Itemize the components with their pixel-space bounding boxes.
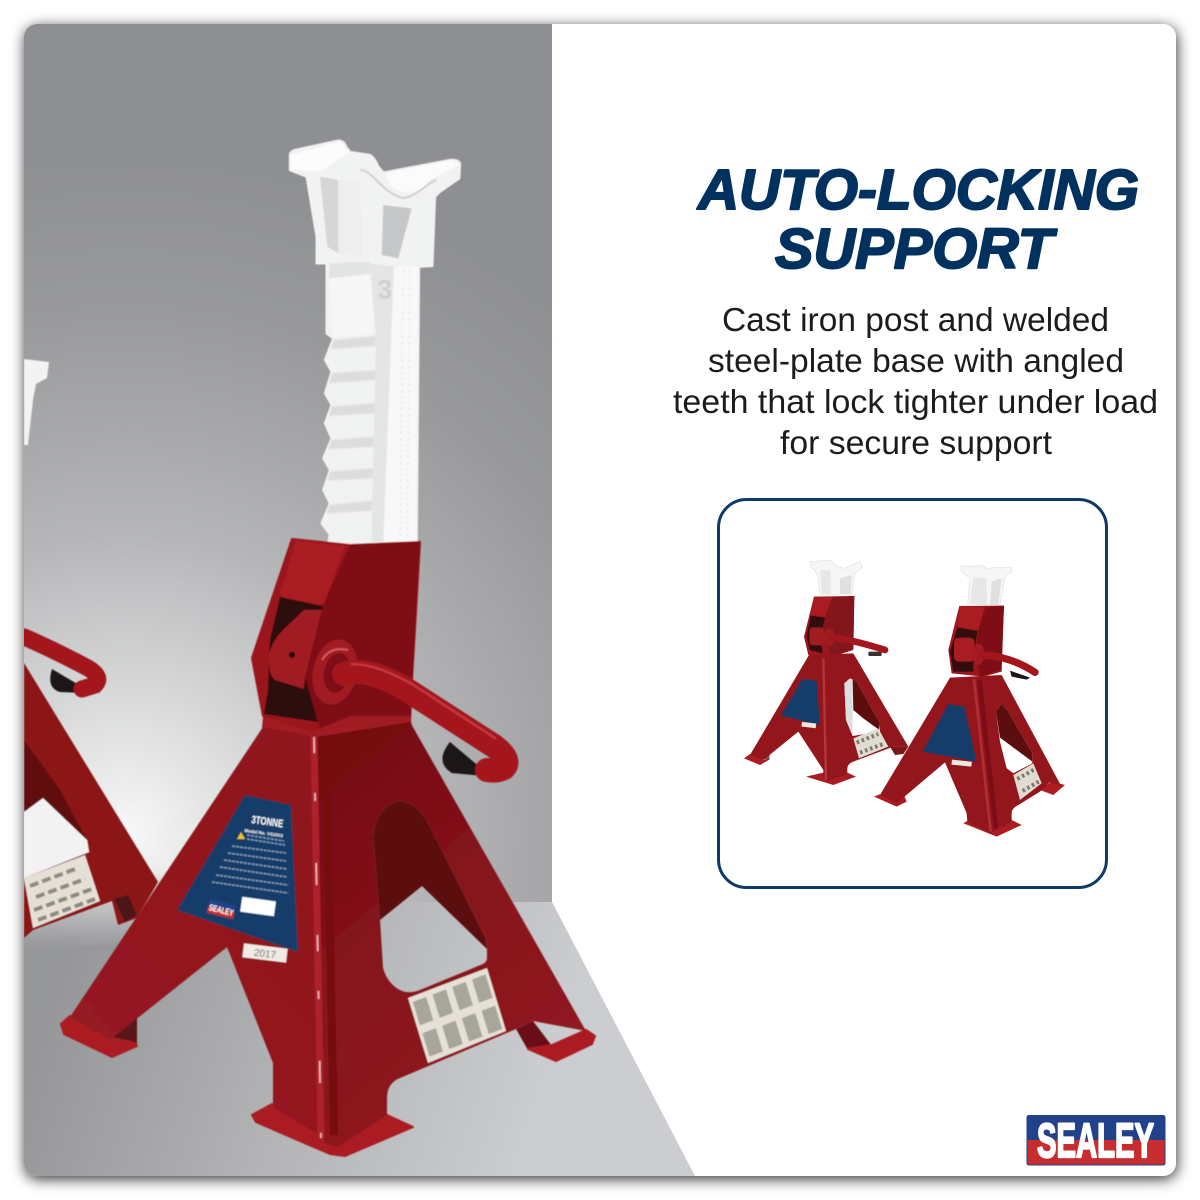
left jack foot shadow [114, 895, 137, 922]
head slot [264, 597, 323, 722]
panel: studio photo [24, 24, 695, 1176]
rear jack window interior [853, 679, 880, 730]
right-of-spine band [326, 745, 334, 1135]
post side band [383, 314, 393, 542]
blue instruction label: Model No. VS2003 [244, 828, 284, 838]
base right face with window [316, 722, 586, 1147]
post saddle top [291, 141, 349, 172]
blue instruction label: SEALEY [208, 902, 235, 918]
main jack [61, 141, 595, 1156]
head side plate [305, 542, 420, 728]
front jack feet [874, 782, 1065, 837]
heading [696, 158, 1139, 281]
front jack rubber [1010, 671, 1030, 680]
base weld band [262, 716, 412, 740]
rear jack window slot [844, 678, 853, 736]
front jack spine [974, 679, 991, 832]
post recess right [382, 205, 412, 258]
post front block [329, 274, 374, 337]
handle [344, 664, 506, 771]
rear jack head [804, 596, 854, 657]
wall backdrop [24, 24, 552, 1176]
description text: teeth that lock tighter under load [673, 383, 1158, 420]
year tag: 2017 [253, 948, 277, 961]
front jack tag [951, 760, 972, 767]
thumbnail frame [718, 500, 1106, 888]
centre spine highlight [314, 737, 321, 1138]
base left face [70, 727, 338, 1147]
spine sparkle [314, 737, 321, 1138]
description text [673, 301, 1158, 461]
front jack handle [983, 655, 1035, 672]
post side shading [370, 263, 394, 542]
rear jack post [811, 560, 863, 595]
cylinder hole [289, 652, 295, 658]
window rear interior [374, 801, 487, 949]
rear jack label [781, 679, 820, 725]
left partial jack [24, 359, 158, 938]
left jack safety sticker [24, 855, 100, 928]
rear jack handle [832, 637, 885, 650]
rear feet [113, 1018, 551, 1049]
rear jack feet [744, 747, 908, 785]
description text: steel-plate base with angled [708, 342, 1124, 379]
head top plate [280, 540, 345, 605]
rear jack rubber [868, 652, 882, 656]
year tag [242, 943, 288, 963]
front jack window interior [996, 703, 1032, 762]
head housing [252, 539, 420, 735]
collar [307, 635, 363, 709]
rubber pad [442, 742, 477, 776]
cast iron post [290, 141, 460, 543]
wall shadow band [24, 878, 229, 950]
post texture [400, 270, 410, 540]
post silhouette [290, 141, 460, 543]
description text: for secure support [780, 424, 1052, 461]
thumbnail: rear jack [744, 560, 908, 785]
post recess left [320, 177, 338, 253]
post saddle groove [360, 170, 437, 198]
front jack right shade [979, 680, 996, 828]
heading: AUTO-LOCKING [696, 158, 1139, 222]
ratchet cylinder [269, 610, 322, 689]
left jack legs [24, 663, 158, 938]
front jack label [923, 704, 977, 762]
left jack handle [24, 637, 98, 689]
rear jack tag [801, 722, 816, 728]
floor [24, 902, 695, 1176]
front jack head [948, 606, 1004, 677]
safety sticker [408, 968, 506, 1063]
post tooth shading [327, 336, 376, 513]
post cap band [329, 262, 370, 278]
heading: SUPPORT [775, 217, 1057, 281]
foot plates [61, 1016, 595, 1156]
rear jack spine [823, 658, 826, 780]
front jack sticker [1013, 763, 1042, 800]
thumbnail: front jack [874, 566, 1065, 837]
left jack rear interior [24, 740, 87, 840]
blue instruction label [177, 795, 298, 952]
description text: Cast iron post and welded [722, 301, 1109, 338]
front jack post [961, 566, 1012, 605]
rear jack sticker [853, 728, 888, 758]
front jack legs [880, 675, 1061, 833]
left jack post [24, 359, 49, 445]
post saddle right lip [385, 161, 459, 192]
rear jack legs [750, 653, 908, 782]
post cast number: 3 [377, 274, 392, 304]
blue instruction label: 3TONNE [251, 814, 284, 830]
post centre rib [338, 180, 362, 257]
left jack rubber pad [50, 668, 76, 694]
left jack window background [24, 798, 89, 878]
